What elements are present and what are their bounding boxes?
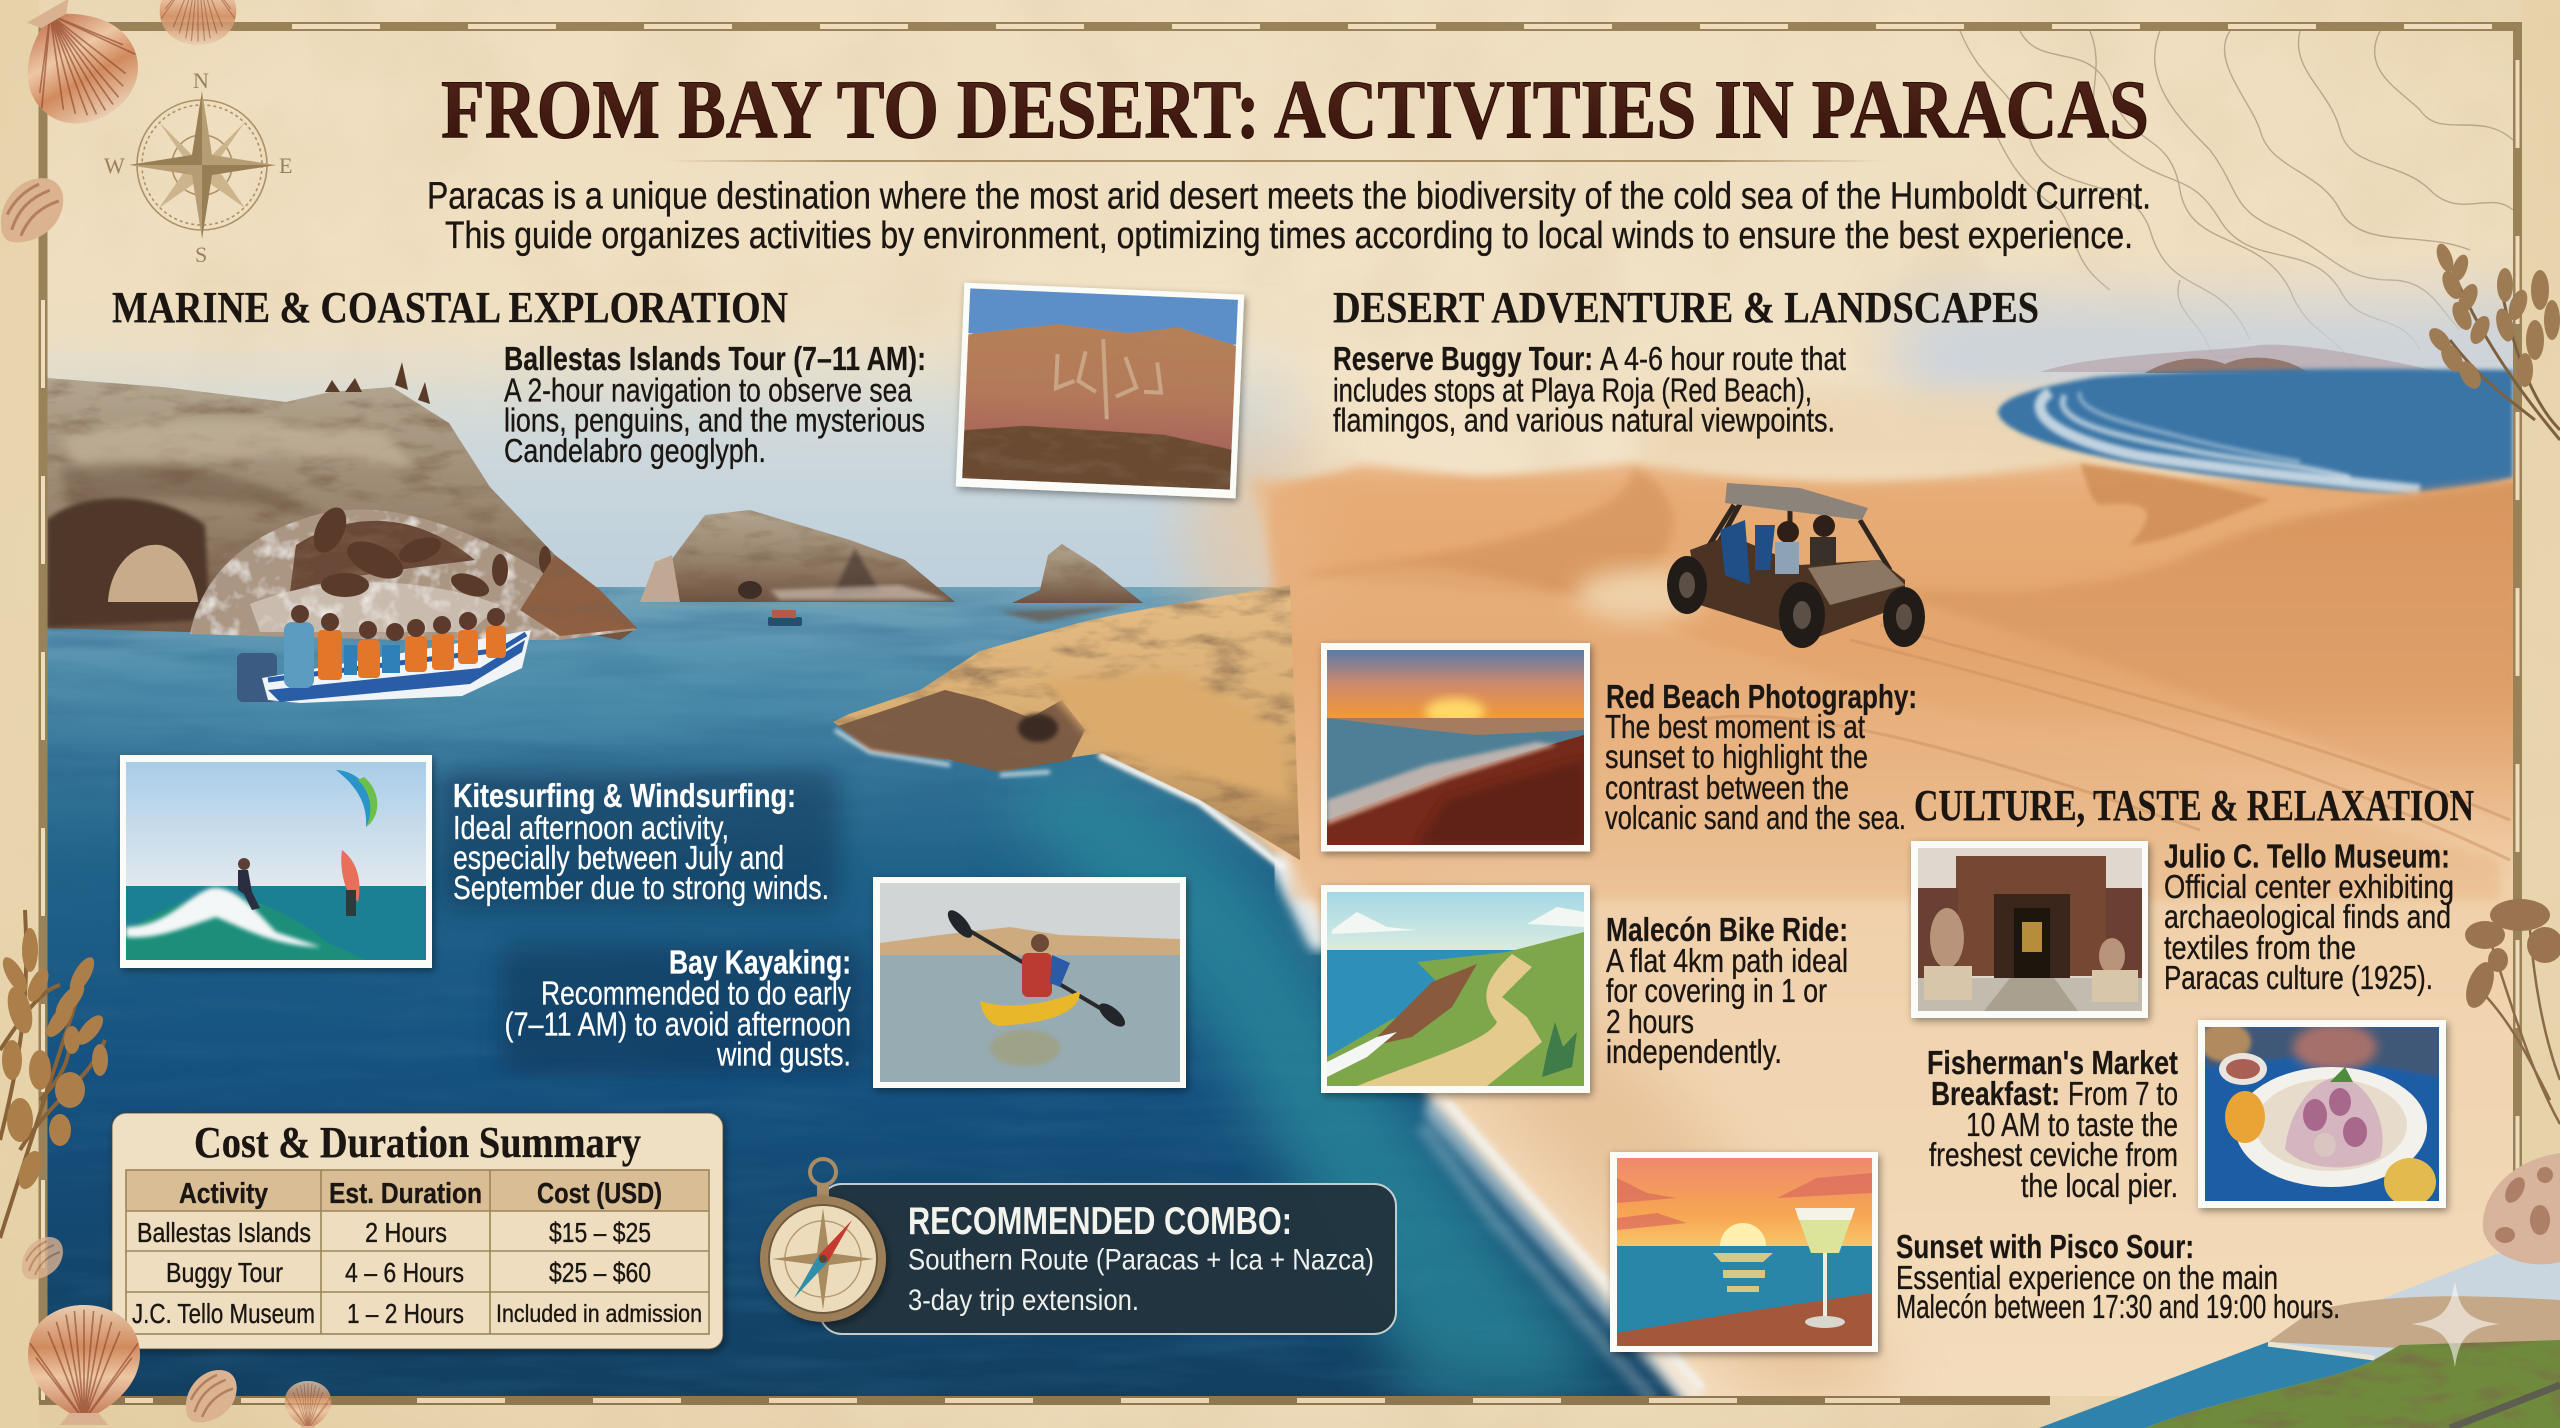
text: Ballestas Islands Tour: lions, penguins, and the mysterious (504, 402, 925, 438)
text: Reserve Buggy Tour: A 4-6 hour route that (1600, 340, 1846, 377)
scene: bay and desert backdrop (0, 300, 2560, 1420)
sky over the desert (1900, 300, 2560, 410)
table: Included in admission (496, 1300, 702, 1328)
decoration: bottom shell (186, 1370, 237, 1422)
surf along the shoreline (1102, 756, 1700, 1396)
main guano rock with sea lions (47, 362, 637, 640)
decoration: top-left scallop shell (0, 0, 156, 143)
text: Ballestas Islands Tour (504, 340, 926, 469)
small rock island (1000, 544, 1143, 622)
text: Reserve Buggy Tour: includes stops at Playa Roja (Red Beach), (1333, 372, 1812, 408)
title rule (665, 160, 1888, 162)
text: Red Beach Photography: The best moment is at (1605, 708, 1865, 745)
text: Red Beach Photography: contrast between the (1605, 769, 1849, 806)
text: Reserve Buggy Tour: flamingos, and various natural viewpoints. (1333, 402, 1835, 438)
text halo (440, 770, 840, 910)
text halo (500, 945, 865, 1075)
text: Ballestas Islands Tour: Ballestas Islands Tour (7–11 AM): (504, 340, 926, 377)
text: Malecón Bike Ride: for covering in 1 or (1606, 972, 1827, 1009)
text: Fisherman's Market Breakfast (1927, 1044, 2178, 1204)
icon: brass compass (760, 1159, 886, 1322)
text: Fisherman's Market Breakfast: 10 AM to taste the (1966, 1106, 2178, 1143)
photo: Julio C. Tello Museum (1911, 841, 2148, 1018)
table: Ballestas Islands (137, 1217, 311, 1248)
photo: sunset with pisco sour (1610, 1152, 1878, 1352)
heading: desert adventure: DESERT ADVENTURE & LANDSCAPES (1333, 283, 2039, 332)
text: Kitesurfing and Windsurfing: September due to strong winds. (453, 869, 829, 906)
compass rose: N (193, 68, 209, 93)
text: Sunset with Pisco Sour: Sunset with Pisco Sour: (1896, 1228, 2194, 1265)
text: Bay Kayaking: Recommended to do early (541, 974, 851, 1012)
compass rose: S (195, 242, 207, 267)
text: Red Beach Photography: volcanic sand and the sea. (1605, 799, 1906, 836)
text: Kitesurfing and Windsurfing: Ideal afternoon activity, (453, 809, 729, 846)
text: Bay Kayaking: (7–11 AM) to avoid afternoon (504, 1006, 851, 1042)
text: Reserve Buggy Tour (1333, 340, 1846, 438)
decoration: right shell (2483, 1153, 2560, 1264)
sky over the bay (48, 354, 1306, 587)
callout: recommended combo: RECOMMENDED COMBO: (908, 1200, 1292, 1243)
decoration: small shell (22, 1237, 63, 1279)
decoration: dried plant bottom left (0, 910, 108, 1238)
photo: Red Beach sunset (1321, 643, 1590, 852)
text: Fisherman's Market Breakfast: Fisherman's Market (1927, 1044, 2178, 1081)
text: Malecón Bike Ride: A flat 4km path ideal (1606, 942, 1848, 979)
photo: coastal bike path (1321, 885, 1590, 1093)
heading: marine and coastal: MARINE & COASTAL EXPLORATION (112, 283, 788, 332)
text: Red Beach Photography (1605, 678, 1917, 836)
tour boat with passengers (237, 605, 531, 703)
intro text: This guide organizes activities by environment, optimizing times according to local winds to ensure the best experience. (445, 215, 2133, 257)
table: $15 – $25 (549, 1217, 651, 1248)
text: Kitesurfing and Windsurfing (453, 777, 829, 906)
intro text: Paracas is a unique destination where the most arid desert meets the biodiversity of the cold sea of the Humboldt Current. (427, 176, 2151, 218)
compass rose: W (104, 153, 125, 178)
decoration: wheat top right (2425, 242, 2560, 440)
photo: kayaking (873, 877, 1186, 1088)
text: Sunset with Pisco Sour (1896, 1228, 2340, 1325)
dust (1575, 569, 1705, 621)
table: Buggy Tour (166, 1257, 283, 1288)
table: Cost (USD) (537, 1178, 662, 1210)
table: 2 Hours (365, 1217, 447, 1248)
text: Bay Kayaking (504, 944, 851, 1072)
text: Julio C. Tello Museum (2164, 838, 2454, 996)
decoration: bottom-left scallop shell (28, 1305, 140, 1425)
table: Est. Duration (329, 1178, 482, 1210)
text: Julio C. Tello Museum: textiles from the (2164, 929, 2356, 966)
sand headland with cliffs (833, 585, 1300, 860)
text: Julio C. Tello Museum: archaeological finds and (2164, 898, 2451, 935)
compass rose (104, 68, 292, 267)
decoration: left conch shell (1, 178, 63, 242)
text: Ballestas Islands Tour: A 2-hour navigation to observe sea (504, 372, 913, 408)
text: Fisherman's Market Breakfast: freshest ceviche from (1929, 1136, 2178, 1173)
ocean (47, 587, 1767, 1397)
text: Ballestas Islands Tour: Candelabro geoglyph. (504, 432, 766, 469)
minor compass points (159, 122, 245, 208)
text: Kitesurfing and Windsurfing: Kitesurfing & Windsurfing: (453, 777, 796, 814)
text: Fisherman's Market Breakfast: the local pier. (2021, 1167, 2178, 1204)
callout: recommended combo (820, 1184, 1396, 1334)
text: Julio C. Tello Museum: Official center exhibiting (2164, 868, 2454, 905)
intro text (427, 176, 2151, 257)
text: Fisherman's Market Breakfast: Breakfast: (1931, 1075, 2060, 1112)
callout: recommended combo: 3-day trip extension. (908, 1284, 1139, 1317)
callout: recommended combo: Southern Route (Paracas + Ica + Nazca) (908, 1244, 1374, 1276)
decoration: bottom small scallop (285, 1381, 331, 1428)
distant bay of the desert coast (1640, 345, 2513, 494)
sparkle watermark (2411, 1281, 2500, 1367)
text: Reserve Buggy Tour: Reserve Buggy Tour: (1333, 340, 1593, 377)
distant rock island (640, 510, 955, 602)
title: FROM BAY TO DESERT: ACTIVITIES IN PARACAS (441, 64, 2149, 156)
table: $25 – $60 (549, 1257, 651, 1288)
panel: cost and duration summary (112, 1113, 723, 1349)
desert and beach land (1060, 480, 2530, 1420)
table heading: Cost & Duration Summary (194, 1118, 641, 1167)
photo: Candelabro geoglyph (956, 283, 1244, 498)
table: J.C. Tello Museum (132, 1298, 315, 1329)
text: Red Beach Photography: sunset to highlight the (1605, 738, 1868, 775)
decoration: top shell (160, 0, 236, 45)
compass rose: E (279, 153, 292, 178)
text: Kitesurfing and Windsurfing: especially between July and (453, 839, 784, 876)
photo: ceviche (2198, 1020, 2446, 1208)
table: 4 – 6 Hours (345, 1257, 464, 1288)
small distant boat (768, 610, 802, 626)
text: Sunset with Pisco Sour: Malecón between 17:30 and 19:00 hours. (1896, 1288, 2340, 1325)
contour map lines (1960, 31, 2513, 380)
text: Malecón Bike Ride (1606, 911, 1848, 1070)
decoration: dried flowers right (2461, 899, 2560, 1124)
text: Julio C. Tello Museum: Paracas culture (1925). (2164, 959, 2433, 996)
text: Julio C. Tello Museum: Julio C. Tello Museum: (2164, 838, 2450, 874)
text: Malecón Bike Ride: Malecón Bike Ride: (1606, 911, 1848, 948)
table: 1 – 2 Hours (347, 1298, 464, 1329)
text: Red Beach Photography: Red Beach Photography: (1606, 678, 1917, 715)
text: Bay Kayaking: wind gusts. (716, 1036, 851, 1072)
photo: kitesurfing (120, 755, 432, 968)
soft blend between sky and dunes (1190, 440, 1320, 610)
text: Bay Kayaking: Bay Kayaking: (669, 944, 851, 980)
table (126, 1170, 709, 1334)
main compass points (129, 91, 276, 239)
text: Malecón Bike Ride: 2 hours (1606, 1003, 1694, 1040)
lower beach tint (1312, 950, 1894, 1396)
landscape corner: coast and fields (2039, 1222, 2560, 1428)
text: Fisherman's Market Breakfast: From 7 to (2068, 1075, 2178, 1112)
table: Activity (179, 1178, 268, 1210)
dunes (1270, 464, 2520, 900)
text: Sunset with Pisco Sour: Essential experience on the main (1896, 1259, 2278, 1296)
dune buggy (1575, 483, 1925, 648)
text: Malecón Bike Ride: independently. (1606, 1033, 1782, 1070)
